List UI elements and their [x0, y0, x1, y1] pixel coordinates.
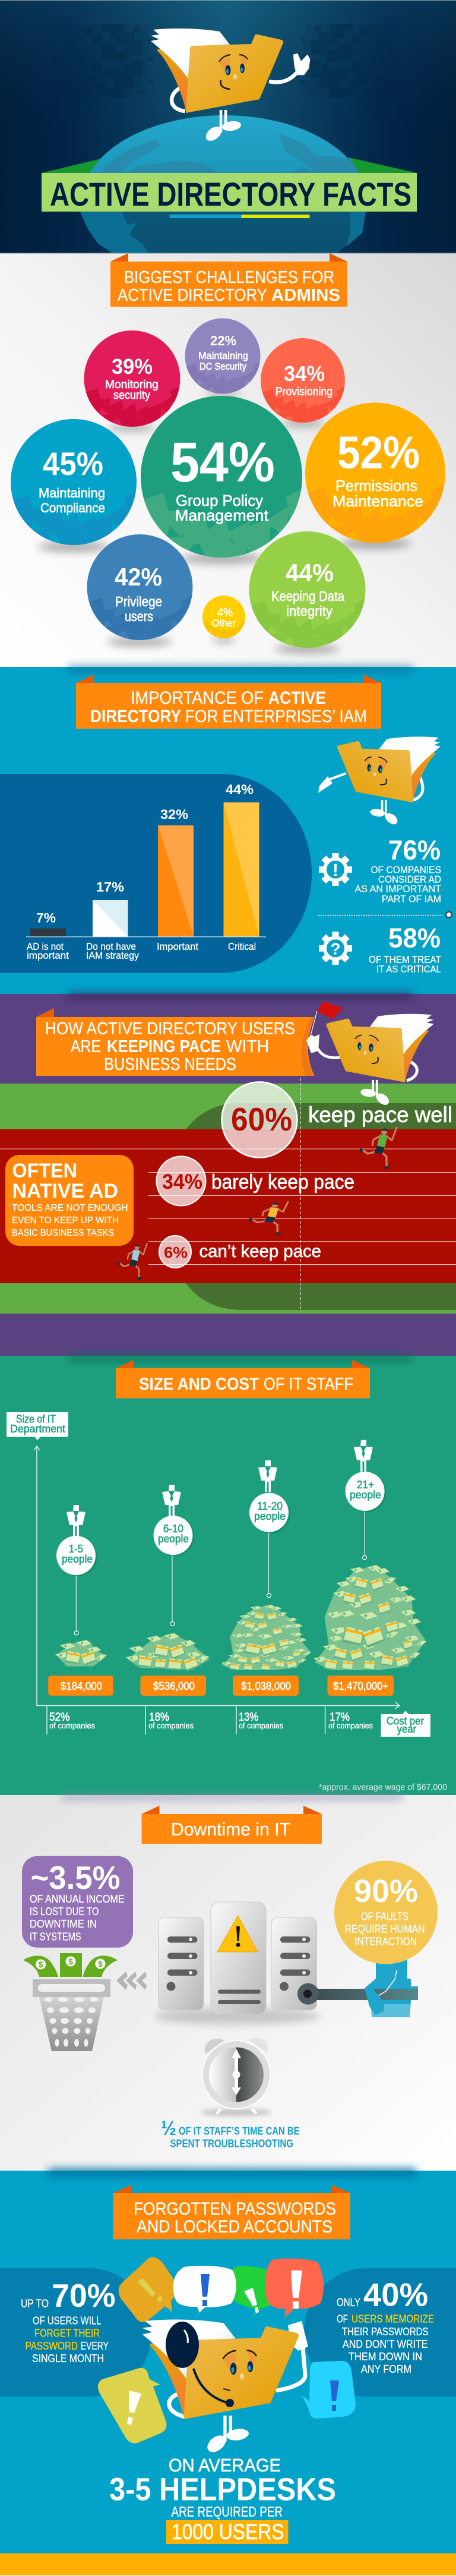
- chart axes: [34, 1446, 400, 1734]
- circle shadows: [38, 392, 411, 654]
- stat: 70% forget password: OF USERS WILL: [33, 2315, 101, 2327]
- icon: money in a wastebasket: [23, 1953, 118, 2051]
- heading banner: [116, 1360, 370, 1398]
- stat: 6% can't keep pace: 6%: [164, 1243, 188, 1261]
- callout: 3.5% annual income lost: [22, 1856, 133, 1948]
- stat: 76%: [355, 834, 441, 905]
- stat: 40% memorize: OF: [337, 2313, 348, 2325]
- column: 1-5 people: people: [62, 1553, 93, 1565]
- circle: 4% other: [202, 596, 245, 638]
- stat: 76%: PART OF IAM: [382, 893, 441, 905]
- callout: often native AD: NATIVE AD: [12, 1180, 118, 1202]
- panel: biggest challenges: [0, 253, 456, 667]
- callout: 3.5% annual income lost: ~3.5%: [31, 1859, 120, 1896]
- column: 6-10 people: people: [158, 1533, 189, 1545]
- speech bubble: red: [265, 2259, 324, 2318]
- stat: 76%: OF COMPANIES: [370, 864, 441, 876]
- stat: 34% barely keep pace: barely keep pace: [211, 1171, 354, 1193]
- callout: 3.5% annual income lost: DOWNTIME IN: [30, 1918, 97, 1930]
- icon: gear with exclamation: !: [332, 861, 338, 880]
- column: 11-20 people: [221, 1460, 312, 1730]
- heading banner: HOW ACTIVE DIRECTORY USERS: [45, 1019, 295, 1038]
- text: half of IT staff's time: SPENT TROUBLESHOOTING: [170, 2138, 293, 2150]
- icon: wrench and hand: [297, 1960, 418, 2017]
- heading banner: ACTIVE: [268, 688, 326, 708]
- heading banner: ADMINS: [271, 286, 340, 305]
- stat: 58%: [369, 922, 441, 975]
- column: 1-5 people: $184,000: [61, 1680, 102, 1692]
- heading banner: KEEPING PACE: [107, 1037, 221, 1056]
- circle: 42% privilege users: [87, 534, 192, 640]
- stat: 60% keep pace well: 60%: [231, 1101, 292, 1138]
- column: 1-5 people: of companies: [49, 1721, 95, 1730]
- running track: [0, 1078, 456, 1314]
- circle: 52% permissions maintenance: 52%: [337, 427, 420, 478]
- bar chart: Critical: [228, 941, 256, 952]
- circle: 45% maintaining compliance: Compliance: [40, 500, 105, 515]
- heading banner: WITH: [226, 1037, 269, 1056]
- axis label: cost per year: year: [397, 1723, 416, 1735]
- stat: 6% can't keep pace: [159, 1236, 321, 1268]
- column: 6-10 people: 6-10: [163, 1523, 183, 1535]
- stat: 40% memorize: THEM DOWN IN: [349, 2351, 422, 2363]
- circle: 39% monitoring security: 39%: [112, 354, 153, 379]
- speech bubble: white: [173, 2266, 236, 2313]
- column: 21+ people: 21+: [357, 1479, 374, 1491]
- circle: 45% maintaining compliance: [11, 419, 137, 545]
- icon: money in a wastebasket: $: [68, 1957, 73, 1966]
- panel: importance for IAM: [0, 666, 456, 994]
- circle: 54% group policy management: Group Policy: [176, 492, 263, 509]
- stat: 70% forget password: PASSWORD: [26, 2340, 78, 2352]
- bar chart: Important: [157, 941, 198, 952]
- circle: 44% keeping data integrity: integrity: [286, 603, 332, 619]
- circle: 34% provisioning: 34%: [284, 361, 325, 386]
- circle: 34% provisioning: [261, 338, 345, 423]
- callout: 90% of faults: REQUIRE HUMAN: [344, 1923, 425, 1935]
- callout: often native AD: EVEN TO KEEP UP WITH: [12, 1215, 119, 1226]
- bar chart: IAM strategy: [86, 950, 139, 961]
- bar chart: [0, 774, 312, 973]
- circle: 54% group policy management: Management: [175, 506, 269, 524]
- callout: 3.5% annual income lost: IT SYSTEMS: [30, 1931, 81, 1942]
- bar chart: important: [27, 950, 69, 961]
- circle: 22% maintaining DC security: Maintaining: [198, 350, 248, 361]
- icon: money in a wastebasket: $: [98, 1959, 103, 1969]
- stat: 58%: 58%: [388, 922, 441, 953]
- stat: 40% memorize: USERS MEMORIZE: [352, 2313, 434, 2325]
- highlight: 1000 users: 1000 USERS: [172, 2520, 284, 2544]
- text: on average 3-5 helpdesks: ARE REQUIRED PER: [171, 2504, 283, 2520]
- stat: 40% memorize: ANY FORM: [361, 2363, 411, 2375]
- stat: 70% forget password: FORGET THEIR: [34, 2328, 100, 2339]
- panel: keeping pace: [0, 993, 456, 1356]
- heading banner: BUSINESS NEEDS: [104, 1055, 236, 1074]
- runner: yellow: [249, 1202, 288, 1235]
- icon: gear with question mark: ?: [330, 940, 341, 958]
- column: 1-5 people: [48, 1505, 113, 1730]
- stat: 70% forget password: UP TO: [21, 2298, 49, 2310]
- column: 21+ people: [314, 1440, 428, 1730]
- heading banner: FORGOTTEN PASSWORDS: [134, 2199, 336, 2219]
- stat: 70% forget password: SINGLE MONTH: [32, 2353, 104, 2364]
- panel: hero: [0, 0, 456, 253]
- circle: 22% maintaining DC security: DC Security: [200, 361, 246, 372]
- icon: money in a wastebasket: $: [39, 1960, 43, 1969]
- heading banner: AND LOCKED ACCOUNTS: [137, 2217, 332, 2237]
- bar chart: 7%: [36, 910, 56, 925]
- icon: servers with warning: [154, 1902, 321, 2024]
- text: half of IT staff's time: [161, 2117, 299, 2150]
- speech bubble: green: [228, 2266, 279, 2316]
- circle: 34% provisioning: Provisioning: [276, 386, 332, 398]
- stat: 40% memorize: THEIR PASSWORDS: [342, 2326, 429, 2338]
- column: 6-10 people: 18%: [149, 1711, 169, 1724]
- speech bubble: orange: [119, 2257, 179, 2322]
- circle: 44% keeping data integrity: [249, 531, 366, 648]
- callout: often native AD: [5, 1155, 134, 1246]
- stat: 58%: IT AS CRITICAL: [376, 963, 441, 975]
- column: 11-20 people: people: [254, 1510, 286, 1522]
- bar chart: Do not have: [86, 941, 136, 952]
- text: half of IT staff's time: OF IT STAFF’S TIME CAN BE: [179, 2125, 299, 2137]
- callout: 90% of faults: OF FAULTS: [361, 1910, 408, 1922]
- callout: 90% of faults: [334, 1861, 438, 1964]
- heading banner: [36, 1008, 315, 1076]
- icon: half clock: [201, 2038, 272, 2116]
- panel: size and cost of IT staff: [0, 1355, 456, 1795]
- footnote: *approx. average wage of $67,000: [319, 1783, 447, 1793]
- column: 11-20 people: 11-20: [257, 1500, 283, 1512]
- stat: 58%: OF THEM TREAT: [369, 954, 441, 965]
- globe: [80, 115, 366, 253]
- stat: 40% memorize: 40%: [363, 2276, 428, 2313]
- heading banner: SIZE AND COST: [139, 1375, 259, 1394]
- axis label: cost per year: Cost per: [387, 1715, 424, 1727]
- runner: green: [360, 1128, 397, 1169]
- callout: 90% of faults: 90%: [354, 1873, 418, 1909]
- heading banner: OF IT STAFF: [264, 1375, 353, 1394]
- circle: 4% other: 4%: [217, 606, 233, 619]
- stat: 76%: 76%: [388, 834, 441, 865]
- circle: 44% keeping data integrity: 44%: [286, 559, 334, 587]
- stat: 34% barely keep pace: [157, 1157, 354, 1205]
- column: 21+ people: people: [350, 1489, 381, 1501]
- stat: 40% memorize: [337, 2276, 434, 2375]
- text: on average 3-5 helpdesks: [109, 2455, 336, 2520]
- stat: 70% forget password: 70%: [52, 2277, 115, 2314]
- heading banner: IMPORTANCE OF: [131, 688, 264, 708]
- column: 11-20 people: 13%: [239, 1711, 258, 1724]
- column: 1-5 people: 1-5: [69, 1543, 83, 1555]
- panel: forgotten passwords: [0, 2168, 456, 2553]
- footer band: [0, 2553, 456, 2575]
- column: 11-20 people: $1,038,000: [241, 1680, 291, 1692]
- callout: often native AD: TOOLS ARE NOT ENOUGH: [12, 1203, 128, 1213]
- character: folder pointing: [318, 736, 441, 827]
- axis label: cost per year: [381, 1711, 430, 1737]
- circle: 54% group policy management: [141, 396, 302, 558]
- icon: gear with question mark: [319, 932, 352, 965]
- column: 21+ people: $1,470,000+: [333, 1680, 388, 1692]
- heading banner: FOR ENTERPRISES’ IAM: [185, 707, 367, 726]
- stat: 60% keep pace well: [222, 1082, 452, 1158]
- heading banner: ACTIVE DIRECTORY: [118, 286, 267, 305]
- speech bubble: olive: [98, 2368, 167, 2443]
- character: folder with flag: [306, 1001, 433, 1107]
- stat: 76%: CONSIDER AD: [378, 874, 441, 885]
- stat: 40% memorize: ONLY: [337, 2297, 360, 2309]
- heading banner: [76, 675, 381, 729]
- column: 21+ people: 17%: [330, 1711, 350, 1724]
- text: half of IT staff's time: ½: [161, 2117, 176, 2140]
- axis label: size of IT department: Size of IT: [16, 1413, 56, 1425]
- circle: 42% privilege users: 42%: [115, 563, 162, 591]
- speech bubble: cyan: [302, 2361, 356, 2418]
- circle: 42% privilege users: users: [125, 609, 153, 624]
- stat: 70% forget password: EVERY: [81, 2340, 109, 2352]
- heading banner: [113, 2185, 350, 2240]
- circle: 42% privilege users: Privilege: [115, 594, 162, 609]
- text: on average 3-5 helpdesks: 3-5 HELPDESKS: [109, 2472, 336, 2508]
- circle: 44% keeping data integrity: Keeping Data: [271, 588, 344, 604]
- callout: often native AD: OFTEN: [12, 1160, 77, 1182]
- column: 1-5 people: 52%: [49, 1711, 70, 1724]
- column: 21+ people: of companies: [328, 1721, 373, 1730]
- panel: downtime in IT: [0, 1794, 456, 2171]
- stat: 34% barely keep pace: 34%: [162, 1170, 202, 1193]
- stat: 70% forget password: [21, 2277, 115, 2364]
- character: folder with headset: [142, 2319, 308, 2455]
- stat: 60% keep pace well: keep pace well: [308, 1103, 452, 1127]
- circle: 52% permissions maintenance: Maintenance: [332, 492, 423, 510]
- column: 11-20 people: of companies: [239, 1721, 283, 1730]
- callout: 3.5% annual income lost: IS LOST DUE TO: [30, 1906, 99, 1917]
- column: 6-10 people: $536,000: [153, 1680, 195, 1692]
- circle: 22% maintaining DC security: 22%: [210, 333, 236, 348]
- heading banner: ARE: [71, 1037, 101, 1056]
- circle: 39% monitoring security: [84, 330, 180, 427]
- bar chart: 44%: [226, 782, 254, 797]
- circle: 45% maintaining compliance: 45%: [43, 445, 103, 482]
- heading banner: [110, 253, 347, 307]
- stat: 76%: AS AN IMPORTANT: [355, 883, 441, 895]
- callout: 90% of faults: INTERACTION: [355, 1935, 417, 1947]
- column: 6-10 people: of companies: [148, 1721, 194, 1730]
- circle: 45% maintaining compliance: Maintaining: [39, 486, 105, 500]
- heading banner: Downtime in IT: [171, 1819, 290, 1840]
- character: folder waving: [151, 29, 310, 144]
- callout: often native AD: BASIC BUSINESS TASKS: [12, 1228, 114, 1238]
- circle: 52% permissions maintenance: Permissions: [335, 477, 417, 495]
- icon: chevrons: [116, 1972, 147, 1990]
- runner: blue: [118, 1244, 147, 1279]
- circle: 39% monitoring security: security: [113, 389, 150, 402]
- heading banner: [141, 1806, 322, 1844]
- bar chart: 32%: [160, 807, 188, 822]
- icon: gear with exclamation: [319, 853, 352, 886]
- column: 6-10 people: [126, 1485, 210, 1730]
- heading banner: BIGGEST CHALLENGES FOR: [124, 268, 334, 287]
- circle: 4% other: Other: [212, 618, 236, 629]
- circle: 22% maintaining DC security: [185, 319, 260, 393]
- axis label: size of IT department: [7, 1412, 68, 1440]
- circle: 39% monitoring security: Monitoring: [105, 379, 159, 391]
- bar chart: 17%: [96, 879, 124, 895]
- stat: 6% can't keep pace: can’t keep pace: [200, 1242, 321, 1261]
- heading banner: DIRECTORY: [90, 707, 181, 726]
- text: on average 3-5 helpdesks: ON AVERAGE: [169, 2455, 281, 2476]
- callout: 3.5% annual income lost: OF ANNUAL INCOME: [30, 1893, 125, 1905]
- axis label: size of IT department: Department: [10, 1423, 65, 1435]
- bar chart: AD is not: [27, 941, 64, 952]
- stat: 40% memorize: AND DON’T WRITE: [343, 2338, 428, 2350]
- circle: 52% permissions maintenance: [305, 403, 445, 543]
- circle: 54% group policy management: 54%: [170, 431, 275, 494]
